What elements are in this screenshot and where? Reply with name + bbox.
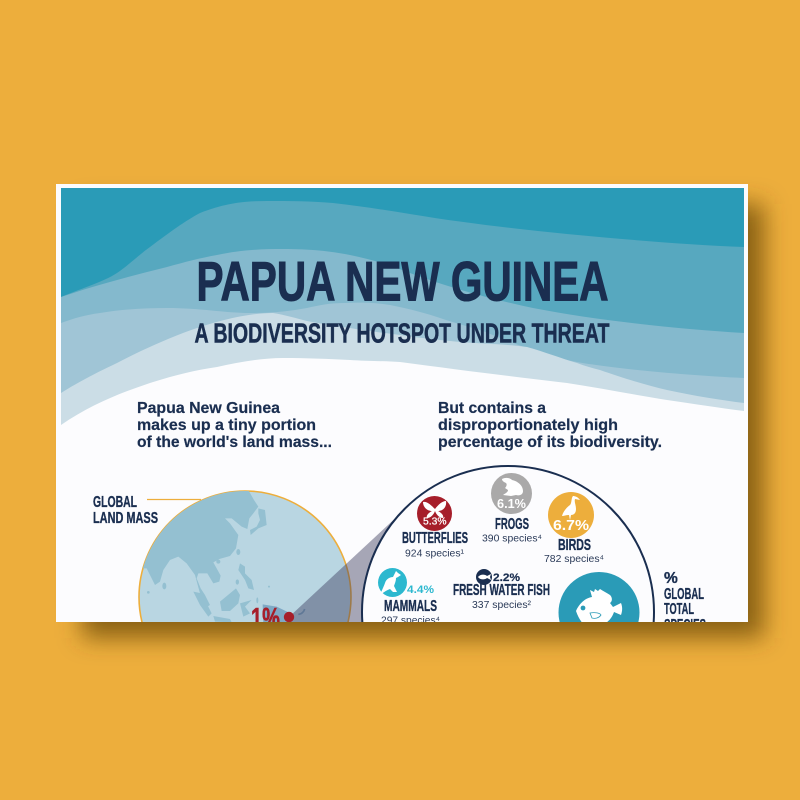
header wave banner <box>61 188 744 430</box>
frogs: 6.1% <box>497 497 526 511</box>
percent global total species label: GLOBAL <box>664 586 704 603</box>
mammals: 297 species⁴ <box>381 614 440 626</box>
butterflies: 924 species¹ <box>405 548 464 560</box>
birds: 782 species⁴ <box>544 553 604 565</box>
icon: small fish <box>478 574 491 580</box>
connector cone <box>290 520 394 622</box>
intro text: land mass: makes up a tiny portion <box>137 417 316 434</box>
intro text: biodiversity: But contains a <box>438 400 546 417</box>
mammals: 4.4% <box>407 584 434 596</box>
one percent marker <box>252 608 294 622</box>
title: PAPUA NEW GUINEA <box>196 250 608 312</box>
birds: 6.7% <box>553 517 589 534</box>
percent global total species label: TOTAL <box>664 601 694 618</box>
fresh water fish: 2.2% <box>493 572 520 584</box>
species circle <box>361 465 655 622</box>
percent global total species label <box>664 572 706 622</box>
card <box>56 184 748 622</box>
butterflies <box>402 496 468 560</box>
icon: frog <box>502 478 523 496</box>
birds: BIRDS <box>558 537 591 554</box>
one percent marker: 1% <box>251 603 280 635</box>
birds <box>544 492 604 565</box>
percent global total species label: SPECIES <box>664 617 706 634</box>
frogs <box>482 473 542 544</box>
globe <box>138 490 352 622</box>
butterflies: 5.3% <box>423 516 446 528</box>
mammals: MAMMALS <box>384 598 437 615</box>
global land mass label: GLOBAL <box>93 494 137 511</box>
global land mass label: LAND MASS <box>93 510 158 527</box>
reef fish <box>558 572 640 622</box>
intro text: land mass: of the world's land mass... <box>137 434 332 451</box>
global land mass label <box>93 496 201 524</box>
icon: bird <box>562 496 580 520</box>
fresh water fish: 337 species² <box>472 599 531 611</box>
icon: large reef fish <box>576 589 622 622</box>
icon: butterfly <box>423 501 446 518</box>
mammals <box>378 568 440 626</box>
frogs: FROGS <box>495 516 529 533</box>
fresh water fish: FRESH WATER FISH <box>453 582 550 599</box>
map: asia landmasses <box>137 485 305 623</box>
percent global total species label: % <box>664 570 678 587</box>
intro text: land mass <box>137 400 332 451</box>
card shadow <box>82 204 764 638</box>
icon: kangaroo <box>381 571 401 593</box>
butterflies: BUTTERFLIES <box>402 530 468 547</box>
intro text: land mass: Papua New Guinea <box>137 400 280 417</box>
fresh water fish <box>453 569 550 611</box>
intro text: biodiversity <box>438 400 662 451</box>
intro text: biodiversity: percentage of its biodiversity. <box>438 434 662 451</box>
intro text: biodiversity: disproportionately high <box>438 417 618 434</box>
frogs: 390 species⁴ <box>482 532 542 544</box>
subtitle: A BIODIVERSITY HOTSPOT UNDER THREAT <box>194 318 610 348</box>
